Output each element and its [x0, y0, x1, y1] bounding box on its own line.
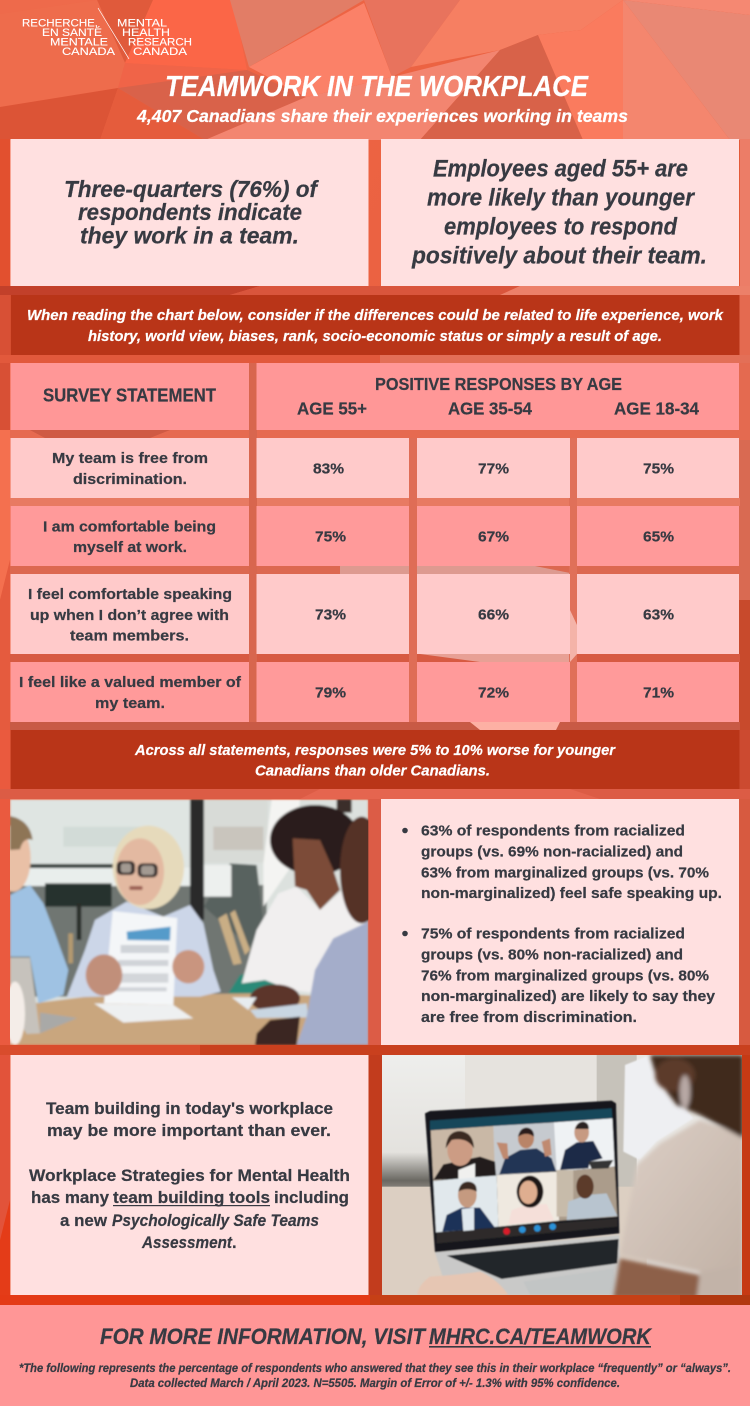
- table row: speaking up: team members.: [70, 628, 189, 644]
- panel: team building tools: Workplace Strategies for Mental Health: [29, 1167, 350, 1185]
- table header: positive responses by age: AGE 18-34: [614, 398, 699, 418]
- panel: employees aged 55+: more likely than younger: [427, 184, 695, 212]
- table row: free from discrimination: 75%: [643, 460, 674, 478]
- panel: employees aged 55+: Employees aged 55+ are: [433, 156, 688, 182]
- panel: team building tools: including: [274, 1189, 349, 1207]
- table row: valued member: I feel like a valued member of: [19, 674, 242, 691]
- bullet: safe speaking up: non-marginalized) feel safe speaking up.: [421, 885, 722, 902]
- foreground man: [338, 815, 368, 925]
- table header: positive responses by age: POSITIVE RESPONSES BY AGE: [375, 374, 622, 394]
- footer call to action: [100, 1324, 653, 1349]
- paper: [104, 911, 177, 1005]
- logo: French wordmark: RECHERCHE,: [22, 18, 98, 30]
- logo: French wordmark: [22, 18, 116, 58]
- banner: age difference summary: [10, 730, 740, 789]
- presenter hair and face: [113, 826, 184, 909]
- bullet: safe speaking up: [402, 822, 722, 902]
- panel: team building tools: a new: [60, 1212, 107, 1230]
- participants: [433, 1157, 496, 1180]
- footer call to action: MHRC.CA/TEAMWORK: [429, 1324, 653, 1349]
- banner: reading note: [10, 295, 740, 355]
- table row: speaking up: [10, 574, 739, 654]
- table row: valued member: 71%: [643, 684, 674, 702]
- panel: team building tools: [10, 1055, 368, 1295]
- bullet: safe speaking up: 63% of respondents from racialized: [421, 822, 685, 840]
- table row: speaking up: I feel comfortable speaking: [28, 586, 232, 603]
- bullet: safe speaking up: 63% from marginalized groups (vs. 70%: [421, 864, 709, 882]
- table row: comfortable being myself: 65%: [643, 528, 674, 546]
- banner: age difference summary: Across all statements, responses were 5% to 10% worse for younger: [134, 743, 616, 759]
- panel: team building tools: .: [232, 1234, 237, 1252]
- panel: employees aged 55+: [381, 139, 739, 286]
- laptop: [10, 958, 40, 1034]
- banner: reading note: history, world view, biases, rank, socio-economic status or simply a result of age.: [88, 329, 662, 345]
- table row: comfortable being myself: myself at work.: [73, 539, 187, 556]
- laptop body: [425, 1101, 619, 1252]
- logo: [22, 8, 192, 59]
- table header: positive responses by age: [256, 363, 739, 430]
- table row: speaking up: 66%: [478, 606, 509, 624]
- footnote: Data collected March / April 2023. N=5505. Margin of Error of +/- 1.3% with 95% confidence.: [130, 1378, 620, 1390]
- footer call to action: FOR MORE INFORMATION, VISIT: [100, 1324, 426, 1349]
- table row: valued member: 79%: [315, 684, 346, 702]
- logo: English wordmark: [117, 18, 192, 58]
- logo: English wordmark: MENTAL: [117, 18, 167, 30]
- table row: free from discrimination: [10, 438, 739, 498]
- panel: team building tools: Team building in today's workplace: [46, 1100, 333, 1118]
- logo: English wordmark: CANADA: [133, 46, 188, 58]
- bullet: free from discrimination: 75% of respondents from racialized: [421, 926, 685, 942]
- panel: team building tools: Psychologically Safe Teams: [112, 1212, 319, 1230]
- table row: comfortable being myself: 75%: [315, 528, 346, 546]
- panel: three-quarters stat: they work in a team.: [80, 222, 299, 248]
- logo: French wordmark: MENTALE: [50, 36, 108, 48]
- bullet: free from discrimination: [402, 926, 716, 1026]
- table row: valued member: 72%: [478, 684, 509, 702]
- table row: free from discrimination: discrimination.: [73, 471, 187, 488]
- presenter shirt: [67, 902, 221, 997]
- logo: French wordmark: EN SANTÉ: [42, 26, 102, 39]
- table row: comfortable being myself: [10, 506, 739, 566]
- photo background and laptop: [380, 1055, 747, 1295]
- foreground person: [613, 1055, 743, 1298]
- table row: valued member: [10, 662, 739, 722]
- table row: free from discrimination: My team is free from: [52, 450, 208, 467]
- table row: comfortable being myself: 67%: [478, 528, 509, 546]
- right woman: [270, 805, 360, 875]
- presenter hands: [86, 954, 122, 996]
- panel: team building tools: may be more important than ever.: [47, 1122, 331, 1140]
- panel: racialized and marginalized groups: [381, 799, 739, 1045]
- table row: speaking up: 73%: [315, 606, 346, 624]
- white wall behind person: [623, 1055, 693, 1160]
- panel: team building tools: team building tools: [113, 1189, 270, 1207]
- bullet: safe speaking up: groups (vs. 69% non-racialized) and: [421, 844, 683, 860]
- table top: [10, 993, 333, 1045]
- table row: free from discrimination: 77%: [478, 460, 509, 478]
- panel: employees aged 55+: positively about their team.: [411, 242, 707, 270]
- footnote: [19, 1363, 731, 1390]
- table row: speaking up: 63%: [643, 606, 674, 624]
- title: TEAMWORK IN THE WORKPLACE: [165, 71, 589, 103]
- panel: three-quarters stat: Three-quarters (76%) of: [64, 176, 319, 202]
- panel: employees aged 55+: employees to respond: [444, 214, 678, 240]
- man left: [10, 885, 68, 1003]
- hand: [417, 1272, 508, 1295]
- table row: speaking up: up when I don’t agree with: [30, 607, 229, 624]
- call controls: [503, 1228, 510, 1235]
- footer: [0, 1305, 750, 1406]
- table: [10, 363, 739, 722]
- bullet: free from discrimination: groups (vs. 80% non-racialized) and: [421, 946, 683, 964]
- subtitle: 4,407 Canadians share their experiences working in teams: [136, 106, 628, 126]
- bullet: free from discrimination: 76% from marginalized groups (vs. 80%: [421, 968, 709, 984]
- panel: team building tools: Assessment: [141, 1234, 233, 1252]
- footnote: *The following represents the percentage of respondents who answered that they see this in their workplace “frequently” or “always”.: [19, 1363, 731, 1375]
- table row: free from discrimination: 83%: [313, 460, 344, 478]
- table header: positive responses by age: AGE 35-54: [448, 398, 532, 418]
- table row: comfortable being myself: I am comfortable being: [43, 518, 216, 536]
- logo: French wordmark: CANADA: [62, 46, 116, 58]
- photo: video call on laptop: [380, 1055, 747, 1298]
- banner: age difference summary: Canadians than older Canadians.: [255, 764, 490, 780]
- logo: English wordmark: RESEARCH: [128, 36, 192, 48]
- meeting app: [430, 1108, 612, 1130]
- bullet: free from discrimination: are free from discrimination.: [421, 1009, 637, 1026]
- banner: reading note: When reading the chart below, consider if the differences could be related to life experience, work: [27, 308, 724, 324]
- table header: positive responses by age: AGE 55+: [297, 398, 367, 418]
- bullet: free from discrimination: non-marginalized) are likely to say they: [421, 988, 716, 1005]
- panel: three-quarters stat: [10, 139, 368, 286]
- table row: valued member: my team.: [95, 695, 165, 712]
- logo: English wordmark: HEALTH: [122, 27, 170, 39]
- table header: survey statement: [10, 363, 249, 430]
- photo: team meeting: [0, 799, 383, 1045]
- panel: team building tools: has many: [31, 1189, 110, 1207]
- panel: three-quarters stat: respondents indicate: [78, 199, 302, 225]
- table header: survey statement: SURVEY STATEMENT: [43, 386, 216, 406]
